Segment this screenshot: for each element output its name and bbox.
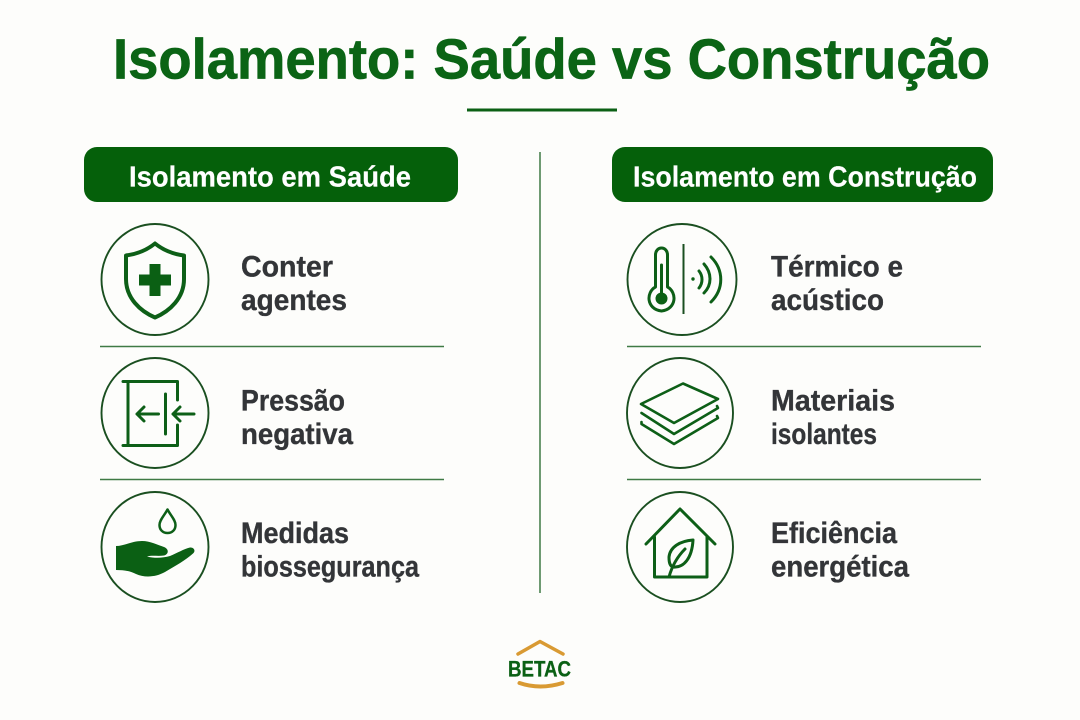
text: pressão negativa: Pressão [241, 384, 345, 418]
heading: isolamento em saúde: Isolamento em Saúde [129, 162, 411, 194]
text: pressão negativa [241, 384, 353, 451]
text: eficiência energética [771, 517, 909, 584]
text: medidas biossegurança [241, 517, 419, 584]
text: materiais isolantes: isolantes [771, 418, 877, 451]
logo: betac [508, 642, 571, 686]
text: térmico e acústico [771, 250, 903, 317]
text: eficiência energética: energética [771, 550, 909, 584]
icon: house with leaf [627, 492, 733, 602]
icon: insulation layers [627, 358, 733, 468]
text: conter agentes [241, 250, 347, 317]
text: conter agentes: Conter [241, 250, 333, 284]
text: medidas biossegurança: biossegurança [241, 550, 419, 584]
text: materiais isolantes: Materiais [771, 384, 895, 418]
heading: isolamento em saúde [84, 147, 458, 202]
title: Isolamento: Saúde vs Construção [113, 28, 990, 92]
icon: shield with cross [102, 224, 208, 335]
icon: door with negative pressure arrows [102, 358, 208, 468]
text: térmico e acústico: acústico [771, 284, 884, 317]
text: pressão negativa: negativa [241, 418, 353, 451]
heading: isolamento em construção [612, 147, 993, 202]
panel: isolamento em construção [612, 147, 993, 602]
icon: hand with drop [102, 492, 208, 602]
text: materiais isolantes [771, 384, 895, 451]
text: conter agentes: agentes [241, 284, 347, 317]
text: medidas biossegurança: Medidas [241, 517, 349, 550]
panel: isolamento em saúde [84, 147, 458, 602]
icon: thermometer and sound waves [628, 224, 736, 335]
text: eficiência energética: Eficiência [771, 517, 897, 550]
text: térmico e acústico: Térmico e [771, 250, 903, 284]
heading: isolamento em construção: Isolamento em Construção [633, 162, 977, 194]
logo: betac: BETAC [508, 656, 571, 682]
